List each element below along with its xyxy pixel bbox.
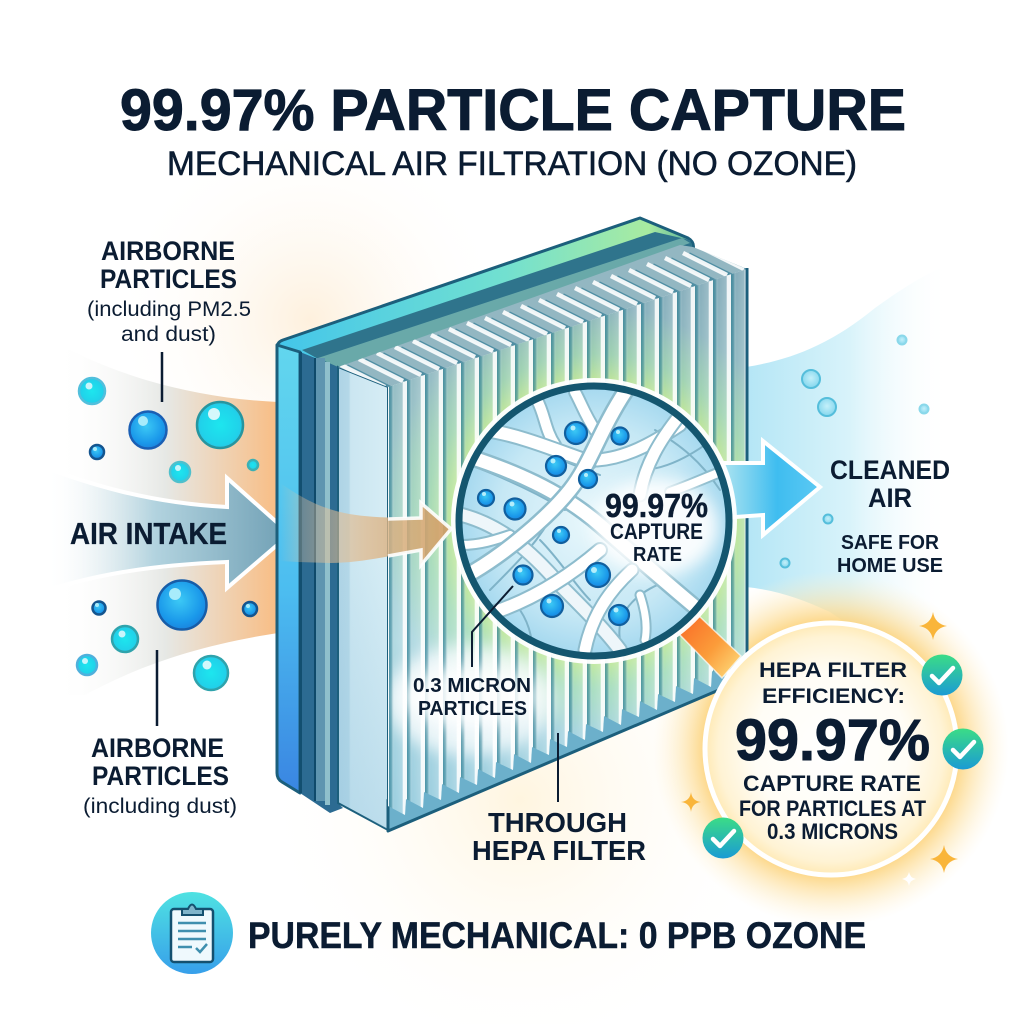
label: 0.3 micron particles: 0.3 MICRON [413,674,531,697]
filter frame top faces [277,218,693,372]
callout text: FOR PARTICLES AT [739,796,926,821]
fiber network [462,392,730,660]
magnifier handle [678,615,741,678]
air intake arrow [33,463,290,595]
lens capture text [605,487,708,566]
lower left label: AIRBORNE [91,733,224,763]
upper left label: AIRBORNE [101,236,235,266]
upper left label: and dust) [121,323,216,346]
sparkles [681,612,958,886]
cleaned air swoosh [746,260,960,690]
label: 0.3 micron particles [413,674,531,720]
label: cleaned air [830,455,950,513]
label: cleaned air: AIR [868,483,912,513]
lower particle cluster [77,580,257,690]
footer statement: PURELY MECHANICAL: 0 PPB OZONE [248,915,866,956]
lens capture text: 99.97% [605,487,708,524]
label: cleaned air: CLEANED [830,455,950,485]
lens capture text: RATE [633,544,682,566]
lower leader line [156,650,158,726]
label: through HEPA filter [472,807,646,866]
callout: HEPA filter efficiency [681,612,984,886]
callout text: CAPTURE RATE [743,771,921,796]
upper left label [87,236,251,346]
icon: clipboard [151,892,233,974]
infographic canvas [70,88,1002,974]
label: 0.3 micron particles: PARTICLES [418,697,527,720]
check badge top [922,654,962,696]
check badge bottom [702,818,744,858]
callout text: EFFICIENCY: [762,685,905,708]
leader line to 0.3 micron particle [472,586,513,667]
pleated media [338,245,750,830]
callout glow [653,571,1009,927]
upper particle cluster [79,378,258,482]
subtitle: MECHANICAL AIR FILTRATION (NO OZONE) [167,145,857,183]
filter bottom band [388,650,747,831]
leader line to through HEPA filter [557,733,559,802]
callout text: HEPA FILTER [759,659,907,682]
lower left label [83,733,237,818]
callout text: 99.97% [735,708,930,773]
label: safe for home use [837,531,943,577]
intake airflow swoosh [55,350,278,695]
clean air particles [780,336,928,568]
label: through HEPA filter: THROUGH [488,807,627,838]
upper leader line [161,352,163,402]
label: through HEPA filter: HEPA FILTER [472,835,646,866]
magnifier lens [451,378,737,664]
filter right edge [746,268,748,655]
callout text: 0.3 MICRONS [767,819,898,844]
captured particles [478,422,629,625]
lens capture text: CAPTURE [610,519,703,544]
label: air intake: AIR INTAKE [70,517,227,551]
title: 99.97% PARTICLE CAPTURE [120,78,906,143]
upper left label: PARTICLES [100,264,237,294]
text glow inside lens [594,479,718,575]
background glow [100,110,780,1024]
upper left label: (including PM2.5 [87,298,251,321]
lower left label: PARTICLES [92,761,229,791]
cleaned air arrow [722,441,820,535]
callout text [735,659,930,844]
lens ring [459,386,729,656]
filter front panel [338,367,388,830]
label: safe for home use: HOME USE [837,554,943,577]
HEPA filter [277,218,750,831]
label: safe for home use: SAFE FOR [841,531,939,554]
arrow through filter [280,483,451,565]
lower left label: (including dust) [83,795,237,818]
filter frame left edge [277,345,343,813]
arrow through filter white outline [388,503,451,565]
check badge middle [942,728,984,770]
